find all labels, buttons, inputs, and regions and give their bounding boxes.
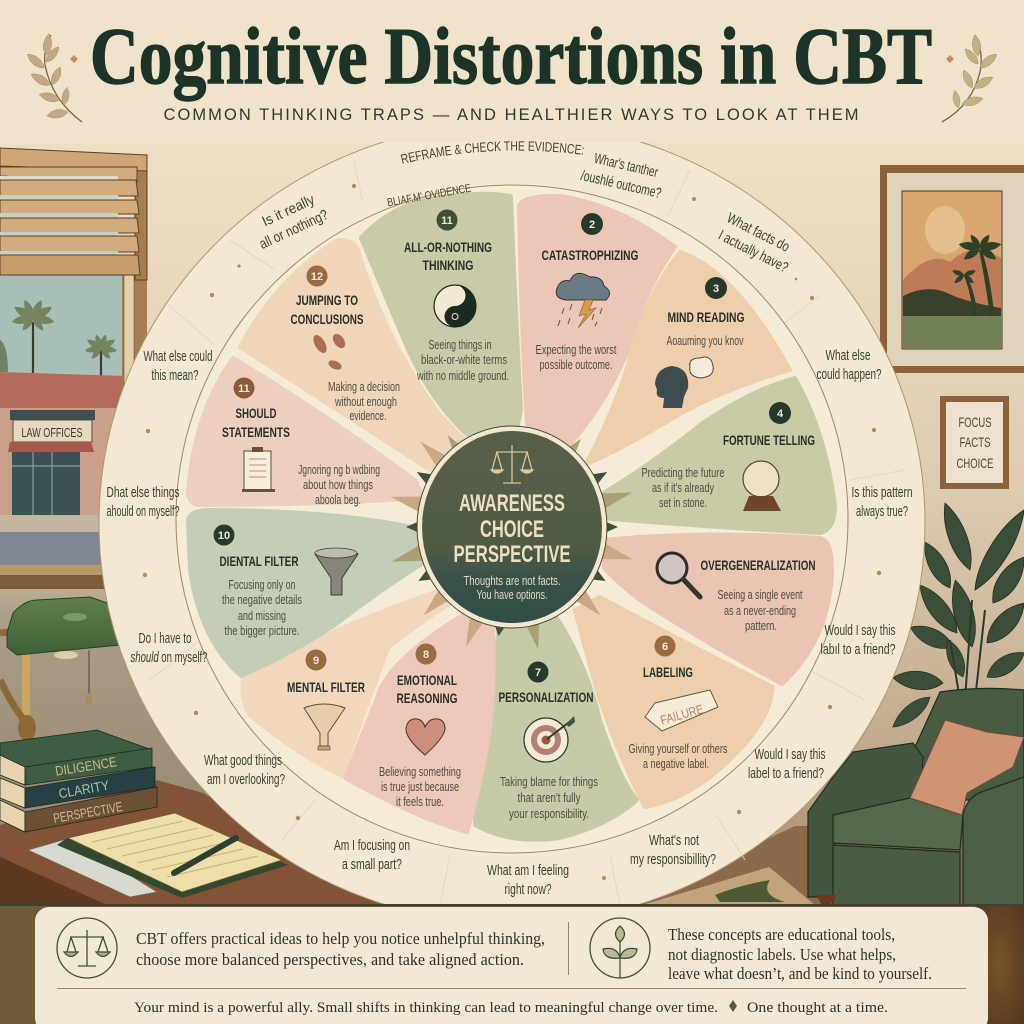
segment: mental filter: 9 — [313, 655, 319, 667]
footer closing line: Your mind is a powerful ally. Small shifts in thinking can lead to meaningful change over time. — [134, 1000, 718, 1016]
reframe questions around the ring: am I overlooking? — [207, 772, 285, 788]
reframe questions around the ring: What good things — [204, 753, 282, 769]
segment: all-or-nothing thinking: black-or-white terms — [421, 353, 507, 367]
segment: labeling: 6 — [662, 641, 668, 653]
reframe questions around the ring: Am I focusing on — [334, 838, 410, 854]
stack of books: DILIGENCE — [54, 754, 118, 779]
reframe questions around the ring: Would I say this — [824, 623, 896, 639]
segment: personalization: that aren't fully — [518, 791, 581, 805]
segment: jumping to conclusions — [240, 240, 470, 470]
segment: labeling — [575, 597, 773, 807]
segment: overgeneralization: as a never-ending — [724, 604, 796, 618]
segment: fortune telling: FORTUNE TELLING — [723, 432, 815, 448]
segment: dental filter — [188, 510, 428, 676]
segment: all-or-nothing thinking: 11 — [441, 215, 453, 227]
footer card — [35, 907, 988, 1024]
window blinds — [0, 148, 147, 280]
reframe questions around the ring: should on myself? — [130, 650, 208, 666]
window with street view — [0, 275, 147, 589]
segment: jumping to conclusions: CONCLUSIONS — [290, 311, 364, 327]
segment: jumping to conclusions: Making a decision — [328, 380, 400, 394]
segment: catastrophizing: CATASTROPHIZING — [542, 247, 639, 263]
armchair pillow — [910, 720, 1024, 815]
framed palm silhouettes — [951, 233, 1002, 316]
decorative sprig left — [25, 33, 82, 122]
icon: storm cloud — [556, 273, 610, 328]
reframe questions around the ring: What else — [826, 348, 870, 364]
footer message right: These concepts are educational tools, — [668, 925, 895, 944]
segment: should statements: SHOULD — [236, 405, 276, 421]
segment: all-or-nothing thinking: ALL-OR-NOTHING — [404, 239, 492, 255]
segment: emotional reasoning: REASONING — [396, 690, 458, 706]
notepad and pen — [28, 813, 288, 898]
segment: catastrophizing: 2 — [589, 219, 595, 231]
footer message left: choose more balanced perspectives, and take aligned action. — [136, 950, 524, 969]
reframe questions around the ring: Whar's tanther — [593, 151, 660, 181]
segment: jumping to conclusions: JUMPING TO — [296, 292, 358, 308]
segment: emotional reasoning — [345, 612, 494, 832]
storefront: LAW OFFICES — [22, 425, 83, 440]
stack of books: PERSPECTIVE — [52, 799, 124, 826]
hub sunburst spikes — [389, 432, 635, 651]
reframe questions around the ring — [106, 151, 912, 898]
outer ring dots — [143, 184, 881, 880]
floor and rug — [624, 826, 1024, 905]
icon: magnifying glass — [657, 553, 700, 597]
footer message right — [668, 925, 932, 983]
segment: emotional reasoning: EMOTIONAL — [397, 672, 457, 688]
segment: should statements: Jgnoring ng b wdbing — [298, 463, 380, 477]
icon: glass funnel — [304, 704, 345, 750]
segment: fortune telling: 4 — [777, 408, 784, 420]
segment: should statements: 11 — [238, 383, 250, 395]
subtitle: COMMON THINKING TRAPS — AND HEALTHIER WAYS TO LOOK AT THEM — [164, 106, 858, 124]
segment: overgeneralization: OVERGENERALIZATION — [700, 557, 816, 573]
segment: dental filter: 10 — [218, 530, 230, 542]
segment: all-or-nothing thinking: with no middle ground. — [416, 369, 509, 383]
reframe questions around the ring: /oushlé outcome? — [579, 168, 663, 202]
segment: labeling: LABELING — [643, 664, 693, 680]
footer message right: leave what doesn’t, and be kind to yourself. — [668, 964, 932, 983]
segment: jumping to conclusions: evidence. — [350, 409, 386, 423]
segment: emotional reasoning: Believing something — [379, 765, 461, 779]
segment: should statements: about how things — [303, 478, 373, 492]
icon: scales badge — [57, 918, 117, 978]
reframe questions around the ring: a small part? — [342, 857, 402, 873]
segment: mind reading — [585, 252, 790, 465]
center hub: awareness choice perspective: PERSPECTIVE — [454, 541, 570, 568]
outer ring label: blurred evidence: BLIAF.M' OVIDENCE — [386, 183, 472, 209]
segment: catastrophizing: possible outcome. — [540, 358, 612, 372]
segment: catastrophizing — [519, 196, 675, 450]
reframe questions around the ring: always true? — [856, 504, 908, 520]
reframe questions around the ring: my responsibillity? — [630, 852, 716, 868]
reframe questions around the ring: ahould on myself? — [106, 504, 180, 520]
icon: heart — [406, 719, 445, 755]
reframe questions around the ring: right now? — [504, 882, 552, 898]
reframe questions around the ring: all or nothing? — [257, 207, 331, 253]
center hub: awareness choice perspective: You have options. — [476, 588, 548, 602]
segment: should statements: aboola beg. — [315, 493, 361, 507]
segment: emotional reasoning: is true just because — [381, 780, 459, 794]
segment: dental filter: the bigger picture. — [224, 624, 300, 638]
center hub: awareness choice perspective: AWARENESS — [459, 490, 565, 517]
icon: sprout badge — [590, 918, 650, 978]
top header band — [0, 0, 1024, 142]
reframe questions around the ring: label to a friend? — [748, 766, 824, 782]
footer message right: not diagnostic labels. Use what helps, — [668, 945, 896, 964]
segment: emotional reasoning: it feels true. — [396, 795, 444, 809]
segment: fortune telling: set in stone. — [659, 496, 707, 510]
icon: crystal ball — [743, 461, 781, 511]
reframe questions around the ring: labıl to a friend? — [820, 642, 896, 658]
reframe questions around the ring: could happen? — [816, 367, 882, 383]
reframe questions around the ring: Is this pattern — [852, 485, 912, 501]
palm trees outside window — [11, 298, 117, 408]
segment: overgeneralization: Seeing a single event — [718, 588, 803, 602]
segment: dental filter: DIENTAL FILTER — [220, 553, 298, 569]
wall sign: focus facts choice: CHOICE — [956, 455, 994, 471]
segment: personalization: PERSONALIZATION — [498, 689, 594, 705]
wall sign: focus facts choice: FOCUS — [958, 414, 992, 430]
storefront — [0, 372, 125, 565]
segment: overgeneralization — [604, 534, 832, 684]
segment: mental filter: MENTAL FILTER — [287, 679, 365, 695]
icon: yin yang — [434, 285, 476, 327]
potted plant leaves — [888, 500, 1024, 733]
segment: personalization: Taking blame for things — [500, 775, 598, 789]
icon: target with dart — [524, 716, 575, 762]
reframe questions around the ring: What facts do — [724, 210, 792, 256]
segment: overgeneralization: pattern. — [745, 619, 777, 633]
stack of books: CLARITY — [57, 778, 110, 801]
wall picture frame with palm sunset — [880, 165, 1024, 373]
segment: mental filter — [242, 590, 455, 776]
footer closing line: One thought at a time. — [747, 1000, 888, 1016]
wall sign: focus facts choice — [940, 396, 1009, 489]
segment: dental filter: Focusing only on — [228, 578, 296, 592]
reframe questions around the ring: What's not — [649, 833, 699, 849]
reframe questions around the ring: this mean? — [152, 368, 198, 384]
icon: failure tag — [645, 690, 718, 731]
segment: dental filter: the negative details — [222, 593, 302, 607]
segment: fortune telling: as if it's already — [652, 481, 715, 495]
segment: mind reading: MIND READING — [668, 309, 745, 325]
segment: emotional reasoning: 8 — [423, 649, 429, 661]
room scene: left wall — [0, 143, 400, 913]
stack of books — [0, 730, 157, 832]
footer message left: CBT offers practical ideas to help you notice unhelpful thinking, — [136, 929, 545, 948]
segment: should statements: STATEMENTS — [222, 424, 290, 440]
segment: jumping to conclusions: without enough — [334, 395, 397, 409]
segment: labeling: Giving yourself or others — [628, 742, 728, 756]
wall sign: focus facts choice: FACTS — [960, 434, 990, 450]
segment: personalization: 7 — [535, 667, 541, 679]
reframe questions around the ring: Do I have to — [138, 631, 192, 647]
segment: dental filter: and missing — [238, 609, 286, 623]
segment: all-or-nothing thinking — [362, 195, 520, 450]
center hub: awareness choice perspective — [389, 426, 635, 651]
icon: head with thought bubble — [655, 357, 713, 408]
segment: fortune telling — [600, 378, 835, 533]
segment: personalization — [475, 615, 637, 840]
room scene: right wall — [624, 143, 1024, 913]
segment: mind reading: 3 — [713, 283, 719, 295]
segment: fortune telling: Predicting the future — [642, 466, 725, 480]
reframe questions around the ring: What am I feeling — [487, 863, 569, 879]
reframe questions around the ring: Is it really — [260, 192, 318, 230]
center hub: awareness choice perspective: Thoughts are not facts. — [464, 574, 560, 588]
outer ring heading: reframe and check the evidence: REFRAME & CHECK THE EVIDENCE: — [400, 141, 584, 164]
footer band — [0, 904, 1024, 1024]
reframe questions around the ring: Dhat else things — [106, 485, 180, 501]
icon: clipboard — [242, 447, 275, 492]
segment: mind reading: Aoauming you knov — [666, 334, 744, 348]
desk lamp — [0, 597, 125, 741]
icon: scales of justice — [491, 445, 533, 483]
segment: personalization: your responsibility. — [509, 807, 589, 821]
segment: should statements — [188, 358, 424, 507]
desk — [0, 780, 400, 905]
icon: metal funnel — [315, 548, 358, 595]
icon: failure tag: FAILURE — [659, 701, 705, 728]
icon: footprints — [311, 332, 348, 372]
footer message left — [136, 929, 545, 969]
segment: jumping to conclusions: 12 — [311, 271, 323, 283]
green armchair — [808, 688, 1024, 905]
segment: catastrophizing: Expecting the worst — [536, 343, 617, 357]
segment: labeling: a negative label. — [643, 757, 709, 771]
segment: all-or-nothing thinking: THINKING — [422, 257, 474, 273]
segment: all-or-nothing thinking: Seeing things in — [428, 338, 492, 352]
center hub: awareness choice perspective: CHOICE — [480, 516, 544, 543]
decorative sprig right — [942, 34, 999, 122]
reframe questions around the ring: I actually have? — [716, 228, 790, 276]
main wheel disc — [99, 122, 925, 924]
reframe questions around the ring: Would I say this — [754, 747, 826, 763]
reframe questions around the ring: What else could — [144, 349, 212, 365]
